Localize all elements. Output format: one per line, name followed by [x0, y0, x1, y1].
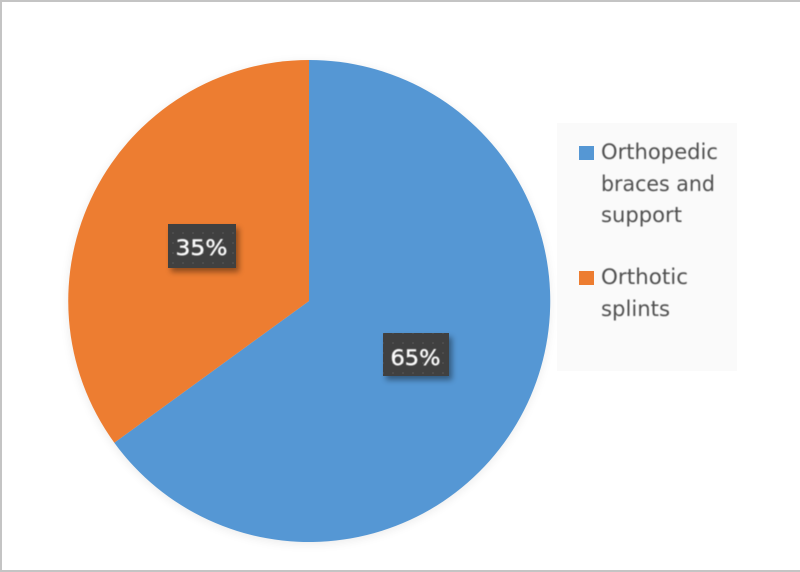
data label: 35%: 35%	[176, 236, 228, 260]
legend entry: Orthopedic braces and support: braces and	[601, 172, 715, 196]
legend entry: Orthotic splints	[579, 265, 688, 321]
slice: Orthopedic braces and support 65%	[114, 60, 550, 542]
legend entry: Orthopedic braces and support	[579, 140, 718, 227]
data label: 65%: 65%	[390, 346, 440, 370]
data label: 65%	[383, 333, 452, 380]
data label: 35%	[168, 224, 239, 272]
legend entry: Orthopedic braces and support: Orthopedic	[601, 140, 718, 164]
legend	[557, 123, 737, 371]
pie chart	[68, 60, 550, 544]
legend entry: Orthotic splints: Orthotic	[601, 265, 688, 289]
slice: Orthotic splints 35%	[68, 60, 309, 443]
legend entry: Orthopedic braces and support: support	[601, 203, 682, 227]
legend entry: Orthotic splints: splints	[601, 297, 670, 321]
